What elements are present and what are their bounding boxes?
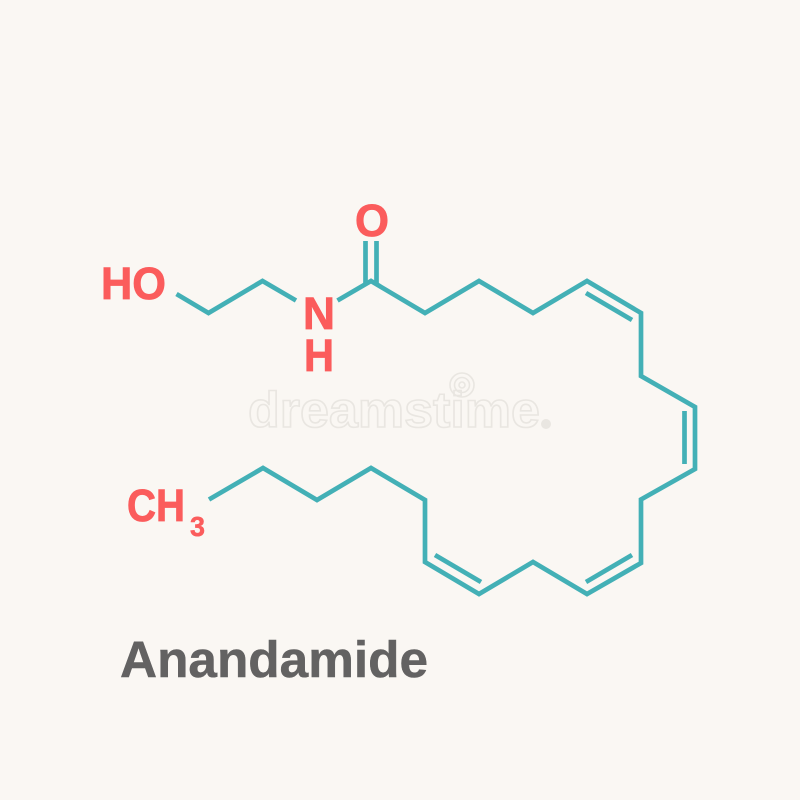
double bond: carbonyl: [366, 241, 376, 283]
bond chain: carbon backbone: [209, 281, 695, 594]
label: CH3: CH: [127, 480, 185, 531]
label: O: O: [355, 195, 389, 246]
double bond: upper right: [586, 293, 632, 320]
label: H: H: [304, 330, 334, 381]
double bond: lower right: [586, 555, 632, 582]
double bond: right: [682, 411, 687, 464]
label: CH3: 3: [190, 511, 205, 542]
double bond: lower left: [435, 555, 481, 582]
molecule skeleton bonds: [176, 241, 695, 594]
label: HO: HO: [101, 258, 166, 309]
label: N: N: [303, 288, 335, 339]
label: CH3: [127, 480, 205, 542]
title: Anandamide: [120, 631, 428, 688]
watermark: dreamstime: [248, 382, 540, 438]
bond chain: hydroxyethyl: [176, 281, 296, 313]
